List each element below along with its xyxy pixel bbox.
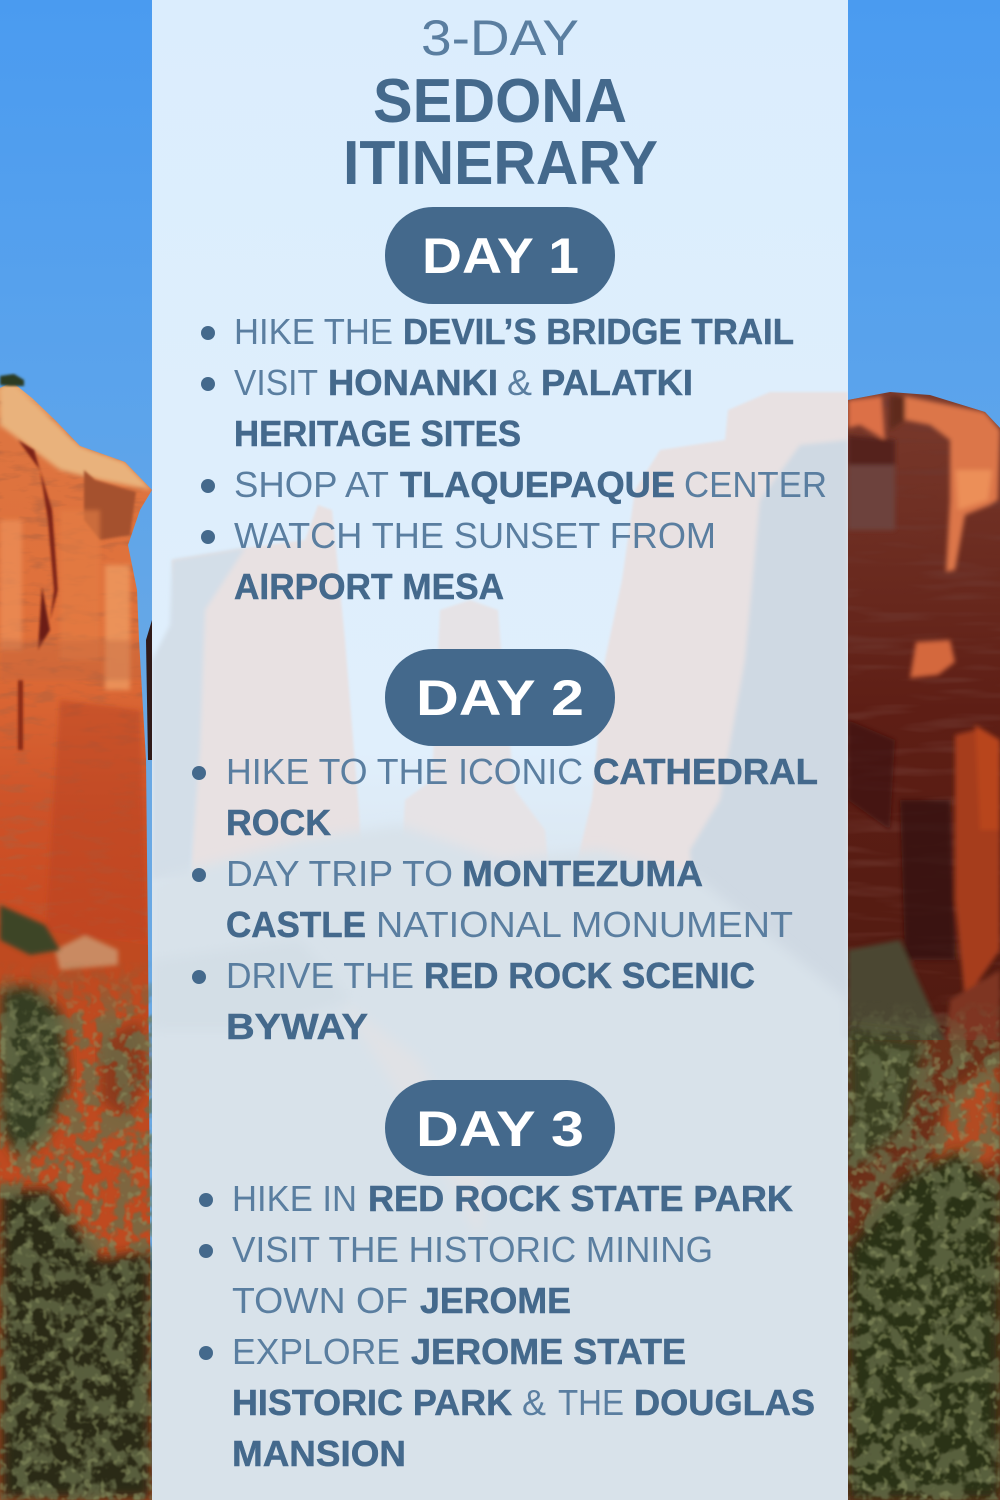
item: Montezuma Castle	[226, 853, 793, 945]
day 1 badge	[385, 207, 615, 304]
left foliage	[0, 960, 152, 1500]
item: Tlaquepaque: CENTER	[684, 464, 827, 505]
faded shadow of right spire	[690, 440, 848, 1040]
item: Airport Mesa	[234, 515, 716, 607]
item: Red Rock State Park: HIKE IN	[232, 1178, 357, 1219]
day 1 badge: DAY 1	[422, 228, 579, 284]
right red rock butte	[848, 390, 1000, 1100]
faded right spire	[575, 392, 848, 870]
faded shadow of left spire	[152, 548, 245, 880]
item: Jerome State Historic Park and Douglas Mansion: THE	[558, 1382, 624, 1423]
day 3 list	[199, 1178, 815, 1474]
title	[343, 10, 658, 198]
item: Airport Mesa: AIRPORT MESA	[234, 566, 504, 607]
item: Red Rock Scenic Byway: BYWAY	[226, 1006, 368, 1047]
day 2 badge	[385, 649, 615, 746]
item: Jerome mining town: VISIT THE HISTORIC MINING	[232, 1229, 713, 1270]
item: Jerome State Historic Park and Douglas Mansion: EXPLORE	[232, 1331, 400, 1372]
item: Tlaquepaque: SHOP AT	[234, 464, 389, 505]
item: Honanki and Palatki: HERITAGE SITES	[234, 413, 521, 454]
dark rock between left butte and panel	[146, 620, 152, 760]
day 1 list	[201, 311, 827, 607]
item: Honanki and Palatki: PALATKI	[541, 362, 693, 403]
day 3 badge	[385, 1080, 615, 1176]
item: Jerome State Historic Park and Douglas Mansion: MANSION	[232, 1433, 406, 1474]
item: Cathedral Rock: CATHEDRAL	[593, 751, 818, 792]
faded left spire	[172, 505, 360, 868]
item: Jerome State Historic Park and Douglas Mansion	[232, 1331, 815, 1474]
bullet markers	[201, 326, 215, 544]
day 3 badge: DAY 3	[416, 1101, 584, 1157]
boulders	[55, 935, 118, 970]
title: ITINERARY	[343, 129, 658, 198]
item: Jerome State Historic Park and Douglas Mansion: HISTORIC PARK	[232, 1382, 512, 1423]
faded lower landscape	[190, 828, 840, 1034]
translucent centre panel with faded rock	[152, 0, 848, 1500]
right lower ground	[848, 1040, 1000, 1500]
item: Cathedral Rock	[226, 751, 818, 843]
item: Red Rock Scenic Byway	[226, 955, 755, 1047]
title: SEDONA	[373, 67, 627, 136]
item: Honanki and Palatki: HONANKI	[328, 362, 498, 403]
item: Montezuma Castle: NATIONAL MONUMENT	[376, 904, 793, 945]
tree top-left	[0, 374, 24, 386]
left red rock butte	[0, 380, 152, 960]
item: Devil's Bridge: HIKE THE	[234, 311, 393, 352]
item: Cathedral Rock: ROCK	[226, 802, 331, 843]
item: Devil's Bridge: DEVIL’S BRIDGE TRAIL	[403, 311, 794, 352]
item: Jerome State Historic Park and Douglas Mansion: DOUGLAS	[634, 1382, 815, 1423]
item: Airport Mesa: WATCH THE SUNSET FROM	[234, 515, 716, 556]
item: Honanki and Palatki: VISIT	[234, 362, 318, 403]
left lower ground	[0, 925, 152, 1500]
item: Tlaquepaque: TLAQUEPAQUE	[400, 464, 675, 505]
title: 3-DAY	[421, 10, 579, 66]
item: Jerome mining town	[232, 1229, 713, 1321]
faded centre spires	[404, 600, 546, 858]
item: Jerome mining town: JEROME	[420, 1280, 571, 1321]
day 2 badge: DAY 2	[416, 670, 584, 726]
bullet markers	[199, 1193, 213, 1360]
item: Honanki and Palatki	[234, 362, 693, 454]
item: Jerome State Historic Park and Douglas Mansion: JEROME STATE	[411, 1331, 686, 1372]
item: Honanki and Palatki: &	[507, 362, 532, 403]
shrubs below butte	[0, 905, 60, 955]
item: Cathedral Rock: HIKE TO THE ICONIC	[226, 751, 583, 792]
day 2 list	[192, 751, 818, 1047]
right foliage	[848, 1000, 1000, 1500]
item: Montezuma Castle: CASTLE	[226, 904, 366, 945]
item: Red Rock Scenic Byway: DRIVE THE	[226, 955, 414, 996]
item: Jerome State Historic Park and Douglas Mansion: &	[522, 1382, 546, 1423]
item: Montezuma Castle: DAY TRIP TO	[226, 853, 453, 894]
item: Red Rock State Park: RED ROCK STATE PARK	[368, 1178, 793, 1219]
item: Jerome mining town: TOWN OF	[232, 1280, 408, 1321]
item: Montezuma Castle: MONTEZUMA	[462, 853, 703, 894]
item: Red Rock Scenic Byway: RED ROCK SCENIC	[424, 955, 755, 996]
bullet markers	[192, 766, 206, 984]
